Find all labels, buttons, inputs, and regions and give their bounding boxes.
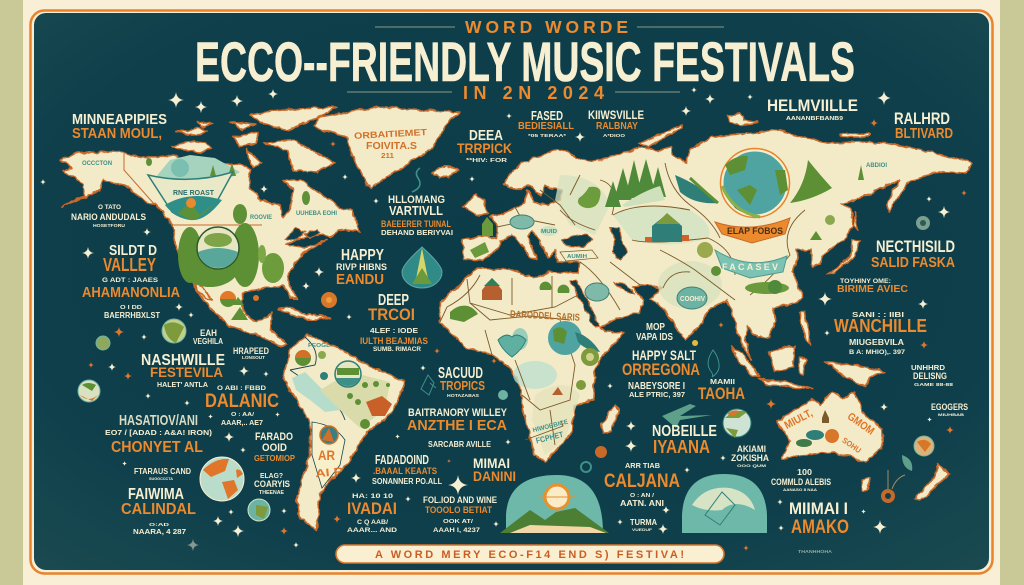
- festival labels: north west: VALLEY: [103, 255, 156, 275]
- festival labels: Indian Ocean: VAPA IDS: [636, 332, 673, 343]
- festival labels: south west: O ABI : FBBD: [217, 386, 267, 392]
- festival labels: south west: VEGHILA: [193, 337, 223, 346]
- festival labels: south west: O : AA/: [231, 412, 255, 418]
- festival labels: Atlantic north: **HIV: FOR: [466, 158, 507, 164]
- festival labels: north west: MINNEAPIPIES: [72, 111, 167, 128]
- festival labels: far east: 100: [797, 468, 813, 477]
- teal mountain scene: [148, 155, 240, 220]
- festival labels: north west: G ADT : JAAES: [102, 277, 159, 284]
- festival labels: north west: O TATO: [98, 205, 121, 211]
- festival labels: Atlantic south: FOL.IOD AND WINE: [423, 495, 497, 506]
- banner text: A WORD MERY ECO-F14 END S) FESTIVA!: [375, 549, 684, 561]
- festival labels: Atlantic south: IULTH BEAJMIAS: [360, 336, 428, 347]
- herb sprays: [675, 160, 832, 203]
- rainforest emblem: [335, 361, 361, 387]
- festival labels: Atlantic south: [347, 292, 516, 534]
- festival labels: Atlantic north: HLLOMANG: [388, 194, 445, 206]
- festival labels: far east: UNHHRD: [911, 365, 945, 372]
- festival labels: far east: AANANBFBANB9: [786, 116, 843, 122]
- ribbon: festivals: [715, 218, 790, 243]
- festival labels: south west: NAARA, 4 287: [133, 529, 186, 536]
- Europe teal badges: [470, 215, 598, 261]
- continent: South America: AI P: [315, 466, 344, 480]
- warehouse icon: [645, 213, 689, 242]
- festival labels: south west: ELAG?: [260, 471, 283, 480]
- festival labels: Atlantic north: KIIWSVILLE: [588, 108, 644, 122]
- festival labels: south west: OOID: [262, 442, 287, 454]
- festival labels: Atlantic south: MIMAI: [473, 455, 510, 471]
- festival labels: far east: EGOGERS: [931, 402, 968, 413]
- festival labels: south west: LONSOUT: [242, 355, 265, 360]
- inner seas: [560, 228, 635, 328]
- South America map label: AR: [318, 447, 335, 463]
- Africa icons: HIWOBBICE: [532, 419, 569, 434]
- dome: teal globe: [682, 474, 767, 533]
- festival labels: far east: RALHRD: [894, 109, 950, 128]
- festival labels: Indian Ocean: ALE PTRIC, 397: [629, 392, 685, 399]
- hammock banner: [148, 172, 233, 219]
- continent: North America: [60, 107, 360, 347]
- festival labels: Indian Ocean: MAMII: [710, 379, 735, 386]
- festival labels: south west: O:AD: [149, 522, 170, 527]
- planet: [162, 319, 186, 343]
- orange medallion: [881, 470, 905, 503]
- festival labels: Indian Ocean: AATN. ANI: [620, 499, 664, 508]
- festival labels: Atlantic south: OOK AT/: [443, 519, 474, 525]
- festival labels: far east: BLTIVARD: [895, 125, 953, 142]
- plane-like teal shape: [662, 404, 712, 428]
- festival labels: north west: SILDT D: [109, 242, 157, 259]
- sunburst: [321, 292, 337, 308]
- festival labels: north west: BAERRHBXLST: [104, 311, 160, 320]
- festival labels: north west: AHAMANONLIA: [82, 284, 180, 301]
- festival labels: far east: B A: MHIO),. 397: [849, 349, 905, 356]
- dome: sunrise and mountains: [500, 475, 609, 533]
- compass icon: [421, 375, 436, 395]
- festival labels: far east: AANASO 8 NAA: [783, 488, 818, 492]
- festival labels: south west: FTARAUS CAND: [134, 467, 191, 476]
- continent: Australia: GMOM: [845, 411, 876, 438]
- festival labels: Atlantic north: BEDIESIALL: [518, 121, 574, 132]
- festival labels: south west: CHONYET AL: [111, 439, 203, 456]
- festival labels: south west: FAIWIMA: [128, 486, 184, 503]
- festival labels: Atlantic south: HA: 10 10: [352, 493, 394, 500]
- festival labels: Indian Ocean: HAPPY SALT: [632, 347, 696, 363]
- festival labels: Atlantic south: AAAH I, 4237: [433, 527, 480, 534]
- continent: South America: FEOGL: [308, 343, 330, 349]
- festival labels: Indian Ocean: TURMA: [630, 517, 657, 527]
- forest scene: [578, 159, 666, 208]
- bottom banner: [336, 545, 724, 563]
- festival labels: Indian Ocean: MOP: [646, 322, 665, 333]
- festival labels: south west: [105, 328, 295, 536]
- festival labels: south west: EAH: [200, 328, 217, 339]
- festival labels: Indian Ocean: ORREGONA: [622, 360, 700, 379]
- festival labels: Atlantic north: HAPPY: [341, 247, 384, 264]
- festival labels: south west: AAAR,.. AE7: [221, 420, 263, 427]
- festival labels: south west: COARYIS: [254, 479, 290, 490]
- festival labels: Atlantic south: DEEP: [378, 292, 409, 309]
- festival labels: Atlantic south: SARCABR AVILLE: [428, 440, 492, 449]
- Africa icons: FCPHET: [535, 430, 564, 445]
- festival labels: south west: FESTEVILA: [150, 364, 223, 380]
- Alaska label: OCCCTON: [82, 161, 112, 167]
- festival labels: Indian Ocean: ZOKISHA: [731, 453, 769, 463]
- medallion: [916, 216, 930, 230]
- forest and lake emblem: [178, 223, 284, 320]
- festival labels: south west: THEENAE: [259, 490, 285, 496]
- festival labels: Atlantic north: VARTIVLL: [389, 203, 443, 218]
- festival labels: Atlantic north: *05 TERAA*: [528, 133, 566, 138]
- festival labels: far east: SALID FASKA: [871, 254, 955, 271]
- planet: [96, 336, 110, 350]
- festival labels: Atlantic south: .BAAAL KEAATS: [373, 466, 437, 476]
- region border lines: [440, 163, 805, 445]
- Greenland label: FOIVITA.S: [366, 141, 417, 152]
- festival labels: Indian Ocean: NABEYSORE I: [628, 381, 685, 392]
- Asia map labels: ABDIOI: [866, 163, 887, 169]
- leaf: [902, 455, 912, 471]
- continent: South America: [283, 335, 405, 530]
- torch icon: [708, 350, 719, 377]
- small icons: [253, 295, 607, 472]
- continent: Greenland: [313, 107, 460, 188]
- festival labels: south west: FARADO: [255, 431, 293, 443]
- festival labels: Atlantic south: 4LEF : IODE: [370, 328, 418, 335]
- festival labels: south west: GETOMIOP: [254, 453, 295, 463]
- festival labels: Indian Ocean: IYAANA: [653, 437, 710, 457]
- festival labels: Atlantic south: SUMB. RIMACR: [373, 347, 422, 353]
- festival labels: Atlantic south: SONANNER PO.ALL: [372, 477, 442, 486]
- festival labels: far east: SANI : : IIBI: [852, 312, 904, 319]
- festival labels: south west: HALET' ANTLA: [157, 382, 208, 389]
- islands: UK, Madagascar, Sri Lanka, Indonesia, Japan: [463, 113, 885, 492]
- festival labels: north west: [71, 111, 180, 320]
- subtitle: IN 2N 2024: [463, 83, 604, 103]
- festival labels: south west: HASATIOV/ANI: [119, 412, 198, 429]
- festival labels: far east: WANCHILLE: [834, 316, 927, 336]
- Asia map labels: COOHIV: [680, 296, 705, 303]
- festival labels: Atlantic south: BAITRANORY WILLEY: [408, 407, 508, 419]
- festival labels: far east: HELMVIILLE: [767, 96, 858, 115]
- festival labels: Atlantic south: TOOOLO BETIAT: [425, 505, 492, 516]
- festival labels: far east: MIIMAI I: [789, 499, 848, 518]
- festival labels: Atlantic south: HOTAZABAS: [447, 393, 479, 398]
- continents: Eurasia and Africa: [440, 130, 972, 462]
- festival labels: far east: DELISNG: [913, 371, 947, 382]
- festival labels: far east: AMAKO: [791, 517, 849, 538]
- festival labels: north west: O I DD: [120, 305, 142, 311]
- New Zealand: [915, 463, 949, 500]
- small planets and icons: [78, 216, 934, 521]
- festival labels: far east: BIRIME AVIEC: [837, 284, 908, 295]
- Europe teal badges: MUID: [541, 229, 557, 235]
- festival labels: Atlantic south: DANINI: [473, 468, 516, 484]
- festival labels: south west: DALANIC: [205, 391, 279, 412]
- festival labels: Atlantic north: DEHAND BERIYVAI: [381, 230, 453, 237]
- Canada map labels: ROOVIE: [250, 215, 272, 221]
- orange stars: [88, 119, 967, 551]
- festival labels: Atlantic north: A*DIOO: [603, 133, 626, 138]
- festival labels: Atlantic south: ANZTHE I ECA: [407, 417, 507, 434]
- ribbon: teal: [715, 250, 787, 278]
- festival labels: Indian Ocean: O : AN /: [630, 493, 655, 499]
- festival labels: Indian Ocean: CALJANA: [604, 471, 680, 492]
- Asia map labels: [677, 163, 887, 309]
- Greenland label: [354, 127, 428, 160]
- festival labels: Indian Ocean: ARR TIAB: [625, 463, 660, 470]
- Greenland label: 211: [381, 153, 394, 160]
- festival labels: north west: STAAN MOUL,: [72, 125, 162, 142]
- continent: North America: UUHEBA EOHI: [296, 211, 337, 217]
- festival labels: far east: THANHHOHA: [798, 549, 833, 554]
- festival labels: Atlantic north: BAEEERER TUINAL: [381, 219, 451, 229]
- festival labels: Atlantic south: SACUUD: [438, 365, 483, 382]
- festival labels: Atlantic north: [336, 108, 644, 288]
- continent: Australia: [777, 392, 882, 462]
- Africa icons: DARODDEL SARIS: [510, 309, 580, 324]
- festival labels: north west: HOSETFORU: [93, 223, 125, 228]
- festival labels: far east: MIUHBAB: [938, 412, 964, 417]
- festival labels: far east: MIUGEBVILA: [849, 337, 904, 347]
- festival labels: north west: NARIO ANDUDALS: [71, 212, 146, 223]
- festival labels: Indian Ocean: [604, 322, 769, 532]
- festival labels: Atlantic south: FADADOIND: [375, 452, 429, 467]
- festival labels: Atlantic south: TROPICS: [440, 378, 485, 393]
- title block: [195, 17, 855, 103]
- festival labels: south west: EO7 / [ADAD : A&A! IRON): [105, 430, 212, 437]
- Australia map labels: MIULT,: [783, 407, 815, 432]
- festival labels: Atlantic north: EANDU: [336, 271, 384, 288]
- festival labels: Atlantic north: TRRPICK: [457, 140, 512, 156]
- festival labels: Atlantic south: TRCOI: [368, 305, 415, 324]
- festival labels: south west: SUGGCCCTA: [149, 476, 173, 481]
- festival labels: Atlantic north: FASED: [531, 108, 563, 123]
- festival labels: far east: NECTHISILD: [876, 237, 955, 256]
- festival labels: Indian Ocean: AKIAMI: [737, 444, 766, 454]
- planet Pacific: [914, 436, 934, 456]
- festival labels: Atlantic south: IVADAI: [347, 499, 397, 518]
- kicker: WORD WORDE: [465, 17, 628, 37]
- star field: [40, 87, 950, 551]
- Europe teal badges: AUMIH: [567, 254, 587, 260]
- festival labels: Indian Ocean: TAOHA: [698, 384, 745, 403]
- continent: Australia: SOHU: [840, 436, 863, 455]
- festival labels: Atlantic north: RIVP HIBNS: [336, 262, 387, 272]
- planet Indian Ocean: [723, 409, 751, 438]
- festival labels: Indian Ocean: NOBEILLE: [652, 423, 717, 440]
- leaf icons: [146, 158, 310, 224]
- Australia food icons: [806, 430, 824, 440]
- festival labels: Indian Ocean: VUEDUF: [632, 528, 653, 532]
- valley banner text: RNE ROAST: [173, 190, 215, 197]
- festival labels: Atlantic north: RALBNAY: [596, 121, 638, 132]
- ribbon: festivals: ELAP FOBOS: [727, 226, 783, 237]
- festival labels: Atlantic south: C Q AAB/: [357, 520, 388, 526]
- festival labels: Atlantic north: DEEA: [469, 127, 503, 144]
- festival labels: far east: GAME 88-88: [914, 382, 954, 387]
- Iceland and sea serpent: [412, 166, 458, 192]
- festival labels: Indian Ocean: OOO QUM: [737, 463, 767, 468]
- globe emblem: [720, 148, 790, 218]
- planet: [248, 499, 270, 521]
- festival labels: far east: TOYHINY OME:: [840, 278, 891, 285]
- festival labels: Atlantic south: AAAR... AND: [347, 527, 397, 534]
- orange circle emblem: [320, 426, 338, 444]
- festival labels: south west: NASHWILLE: [141, 352, 225, 369]
- ribbon: teal: FACASEV: [722, 262, 778, 272]
- festival labels: south west: CALINDAL: [121, 501, 196, 518]
- teardrop globe icon: [402, 247, 442, 288]
- planet: [78, 380, 100, 402]
- festival labels: far east: [767, 96, 968, 554]
- colour washes for regions: [512, 175, 722, 455]
- planet large: [200, 457, 244, 501]
- festival labels: far east: COMMLD ALEBIS: [771, 477, 831, 487]
- festival labels: south west: HRAPEED: [233, 346, 269, 357]
- Greenland label: ORBAITIEMET: [354, 127, 428, 141]
- Africa icons: [450, 278, 609, 445]
- orange house: [366, 396, 392, 416]
